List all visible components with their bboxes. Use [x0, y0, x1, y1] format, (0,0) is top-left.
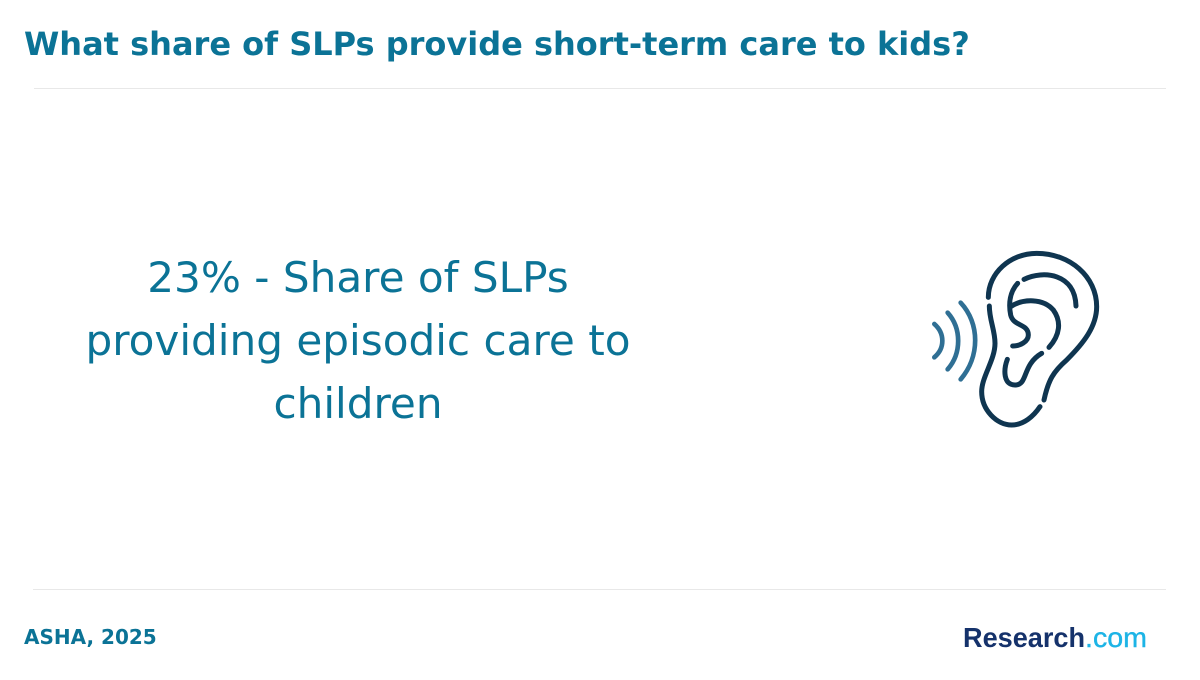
main statistic text [85, 253, 631, 428]
logo: Research.com: Research [963, 622, 1085, 653]
logo: Research.com [963, 622, 1147, 653]
source label: ASHA, 2025 [24, 625, 157, 649]
main statistic text: children [273, 379, 443, 428]
logo: Research.com: .com [1085, 622, 1147, 653]
icon: ear with sound waves [932, 250, 1100, 428]
icon: ear outline [982, 253, 1097, 425]
icon: sound waves [934, 303, 975, 379]
main statistic text: 23% - Share of SLPs [147, 253, 569, 302]
title: What share of SLPs provide short-term care to kids? [24, 25, 970, 63]
main statistic text: providing episodic care to [85, 316, 631, 365]
